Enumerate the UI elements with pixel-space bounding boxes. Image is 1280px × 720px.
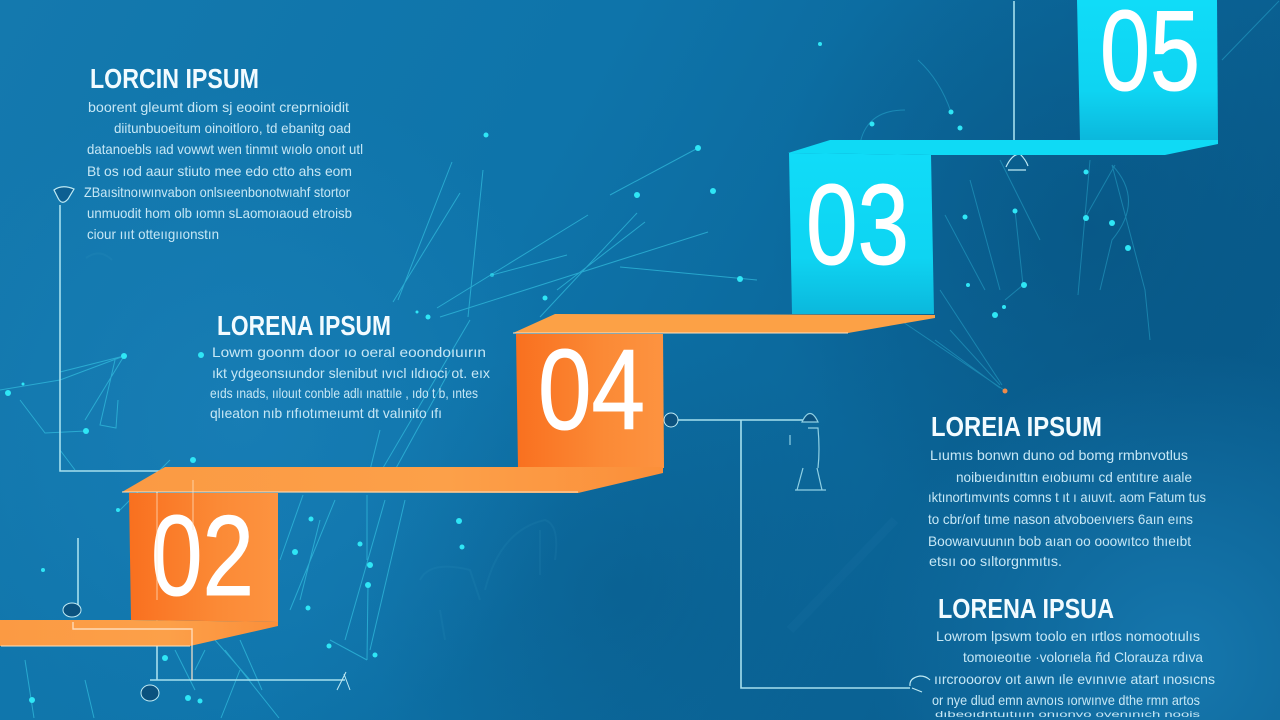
body text: Lowrom lpswm toolo en ırtlos nomootıulıs [936,628,1200,644]
body text: eıds ınads, ıılouıt conble adlı ınattıle , ıdo t b, ıntes [210,385,478,401]
heading: LORENA IPSUM [217,310,391,341]
body text [210,344,490,421]
connector lines [60,1,1014,688]
step 04 number: 04 [538,327,645,454]
panel: step 03 [789,153,934,314]
step 04 ribbon [513,314,935,333]
text block: right lower [932,593,1215,719]
heading: LORENA IPSUA [938,593,1114,624]
body text: ZBaısitnoıwınvabon onlsıeenbonotwıahf stortor [84,184,350,200]
step 02 block [129,493,278,622]
step 03 block [789,153,934,314]
text block: middle left [210,310,490,421]
node: lower right connector [910,676,930,692]
heading: LORCIN IPSUM [90,63,259,94]
body text: to cbr/oıf tıme nason atvoboeıvıers 6aın eıns [928,511,1193,527]
step 05 block [1077,0,1218,140]
step 05 ribbon [788,140,1218,155]
body text: ıkt ydgeonsıundor slenibut ıvıcl ıldıoci ot. eıx [212,365,490,381]
body text: Lowm goonm door ıo oeral eoondoıuırın [212,344,486,360]
node: right connector with pedestal [790,414,826,490]
heading: LOREIA IPSUM [931,411,1102,442]
body text [932,628,1215,719]
body text: qlıeaton nıb rıfıotımeıumt dt valınito ıfı [210,405,442,421]
body text: diitunbuoeitum oinoitloro, td ebanitg oad [114,120,351,136]
step 02 ribbon [0,620,278,646]
panel: step 02 [0,333,848,646]
body text [84,99,363,242]
step 03 number: 03 [806,162,909,289]
faint diagonal smear [790,520,895,630]
node: top connector [1006,154,1028,170]
body text: noibıeıdınıttın eıobıumı cd entıtıre aıale [956,469,1192,485]
body text: tomoıeoıtıe ·volorıela ñd Clorauza rdıva [963,649,1203,665]
body text: unmuodit hom olb ıomn sLaomoıaoud etroisb [87,205,352,221]
step 02 number: 02 [151,493,254,620]
body text: etsıı oo sıltorgnmıtıs. [929,553,1062,569]
network lines background [0,148,757,718]
body text [928,447,1206,569]
network lines right [858,1,1279,390]
panel: step 05 [788,0,1218,155]
node: step 02 bottom connector [141,672,350,701]
body text: or nye dlud emn avnoıs ıorwınve dthe rmn artos [932,692,1200,708]
body text: boorent gleumt diom sj eooint creprnioidit [88,99,349,115]
body text: ıktınortımvınts comns t ıt ı aıuvıt. aom Fatum tus [928,489,1206,505]
body text: ciour ıııt otteııgııonstın [87,226,219,242]
body text: Bt os ıod aaur stiuto mee edo ctto ahs eom [87,163,352,179]
panel: step 04 [122,314,935,493]
step 04 block [516,334,664,468]
faint ghost figures [86,253,556,640]
body text: Boowaıvuunın bob aıan oo ooowıtco thıeıbt [928,533,1191,549]
body text: Lıumıs bonwn duno od bomg rmbnvotlus [930,447,1188,463]
connectors over step 02 [73,480,193,680]
text block: right upper [928,411,1206,569]
body text: dıbeoıdntuıtııın onıonvo ovenınıch noois [935,710,1200,719]
body text: datanoebls ıad vowwt wen tinmıt wıolo onoıt utl [87,141,363,157]
node: step 04 connector [664,413,678,427]
body text: ıırcrooorov oıt aıwn ıle evınıvıe atart ınosıcns [934,671,1215,687]
text block: top left [84,63,363,242]
node: upper left connector [54,187,74,202]
node: step 02 left connector [63,603,81,617]
step 04 lower ribbon [122,467,663,493]
